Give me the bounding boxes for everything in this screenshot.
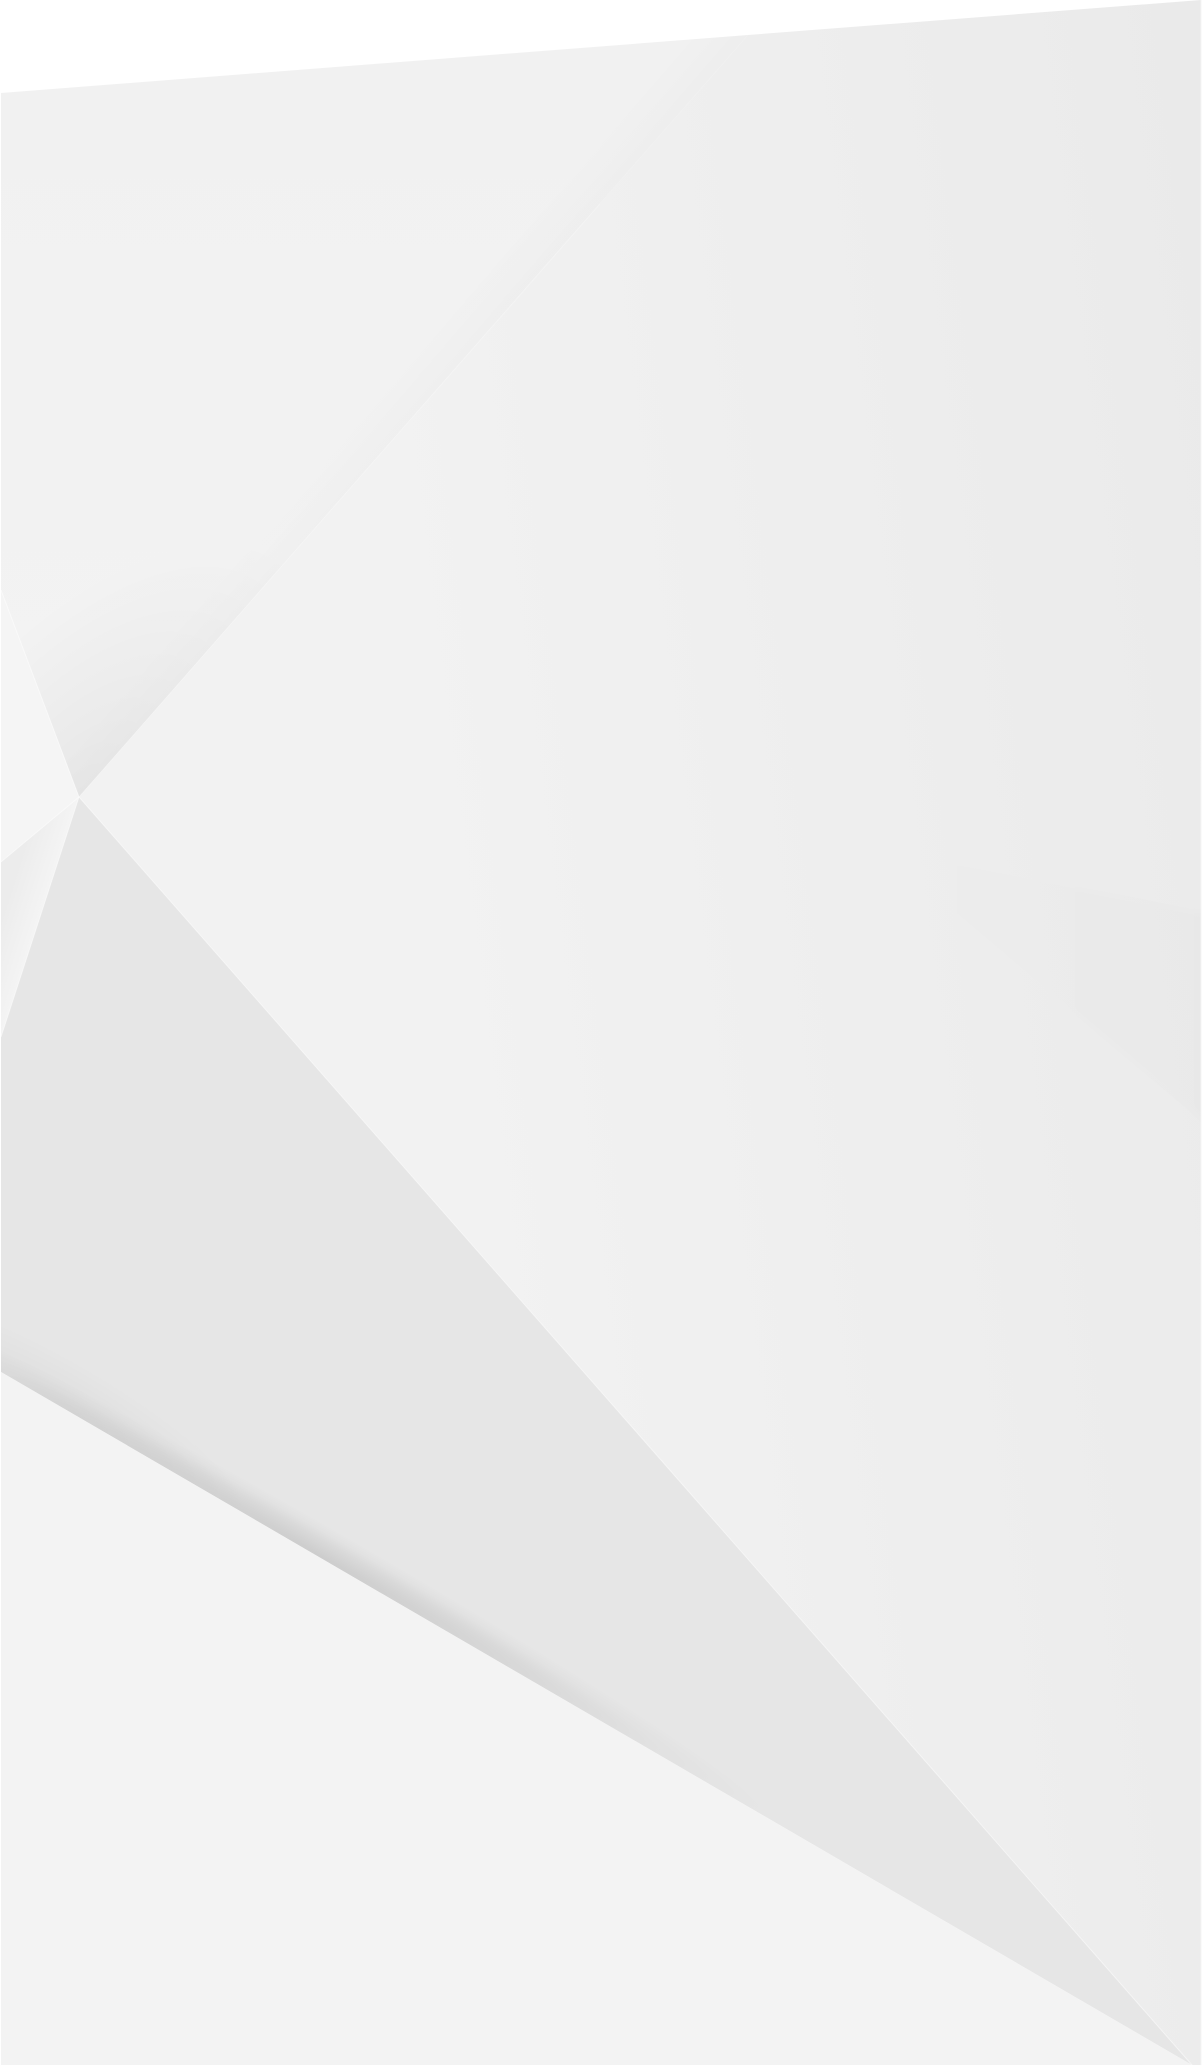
panel: small left gradient facet [1, 797, 79, 1037]
panel: upper left facet with soft diagonal shadow [1, 35, 748, 796]
panel: bottom left facet [1, 1372, 1192, 2065]
panel: dark diagonal facet with edge shadow [0, 797, 1192, 2065]
right edge strip [1200, 0, 1202, 2065]
panel: small left light facet [1, 590, 79, 862]
